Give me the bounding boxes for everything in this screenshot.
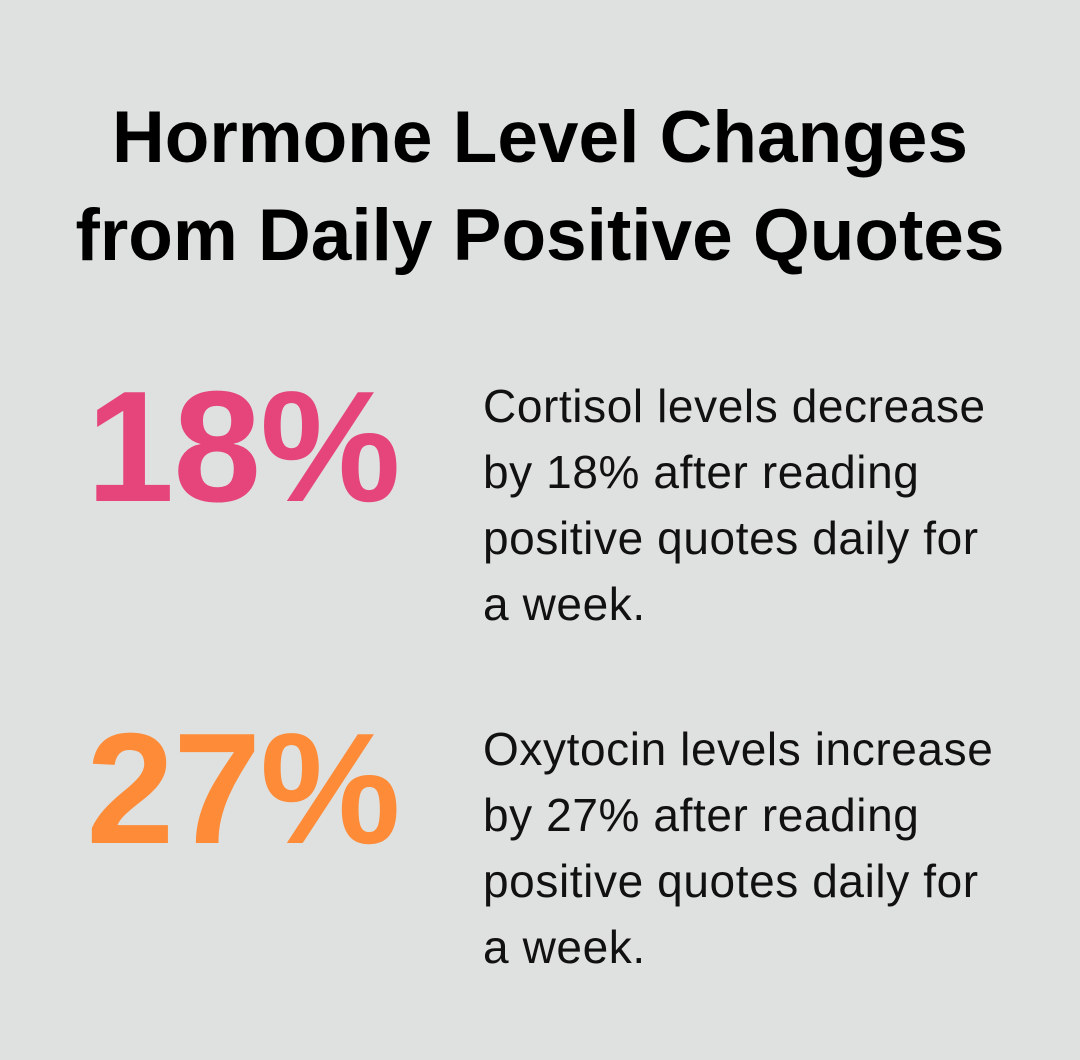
text: cortisol description: by 18% after reading xyxy=(483,446,920,498)
text: cortisol description xyxy=(483,380,986,630)
text: cortisol description: Cortisol levels decrease xyxy=(483,380,986,432)
text: oxytocin description: Oxytocin levels increase xyxy=(483,723,993,775)
text: cortisol description: positive quotes daily for xyxy=(483,512,979,564)
text: oxytocin description xyxy=(483,723,993,973)
title: from Daily Positive Quotes xyxy=(76,195,1004,276)
text: oxytocin description: by 27% after reading xyxy=(483,789,920,841)
title: Hormone Level Changes xyxy=(112,97,968,178)
text: oxytocin description: positive quotes daily for xyxy=(483,855,979,907)
text: cortisol description: a week. xyxy=(483,578,646,630)
stat: 27%: 27% xyxy=(86,701,400,877)
title xyxy=(76,97,1004,276)
stat: 18%: 18% xyxy=(86,359,400,535)
text: oxytocin description: a week. xyxy=(483,921,646,973)
